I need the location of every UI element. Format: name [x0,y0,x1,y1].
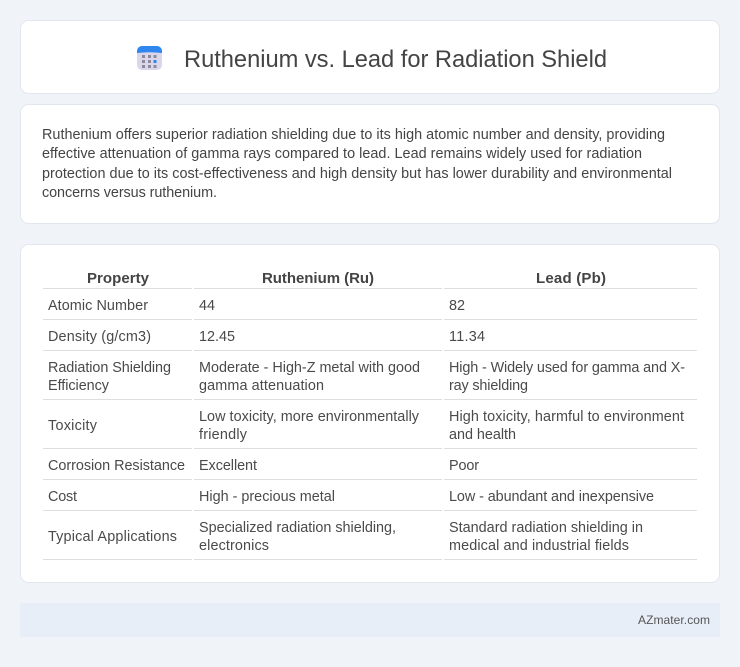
summary text: protection due to its cost-effectiveness and high density but has lower durability and environmental [42,166,672,182]
row: radiation shielding efficiency [48,360,685,394]
panel: comparison table [20,244,720,582]
summary text [42,127,672,201]
row: atomic number: 44 [199,298,215,314]
row: density: 11.34 [449,329,485,345]
row: density: 12.45 [199,329,235,345]
row: radiation shielding efficiency: Efficiency [48,378,110,394]
table header: Ruthenium (Ru) [262,270,374,287]
row: corrosion resistance [48,458,479,474]
row: toxicity: Toxicity [48,418,98,434]
table row lines [43,288,697,560]
row: cost: High - precious metal [199,489,335,505]
summary text: Ruthenium offers superior radiation shielding due to its high atomic number and density, providing [42,127,665,143]
table header: Lead (Pb) [536,270,606,287]
row: typical applications: Standard radiation shielding in [449,520,643,536]
summary text: concerns versus ruthenium. [42,185,217,201]
table header [87,270,606,287]
row: cost [48,489,654,505]
panel: title card [20,20,720,94]
row: toxicity: friendly [199,427,248,443]
row: atomic number: Atomic Number [48,298,148,314]
row: atomic number [48,298,465,314]
row: atomic number: 82 [449,298,465,314]
row: typical applications: Specialized radiation shielding, [199,520,396,536]
icon: calendar abacus [137,46,162,70]
row: toxicity: and health [449,427,516,443]
row: corrosion resistance: Corrosion Resistance [48,458,185,474]
row: typical applications: Typical Applications [48,529,177,545]
row: radiation shielding efficiency: gamma attenuation [199,378,324,394]
table header: Property [87,270,150,287]
row: toxicity: High toxicity, harmful to environment [449,409,684,425]
row: radiation shielding efficiency: ray shielding [449,378,528,394]
footer bar [20,603,720,637]
row: toxicity [48,409,684,443]
row: typical applications: electronics [199,538,269,554]
row: typical applications [48,520,643,554]
row: corrosion resistance: Poor [449,458,479,474]
row: radiation shielding efficiency: Radiation Shielding [48,360,171,376]
summary text: effective attenuation of gamma rays compared to lead. Lead remains widely used for radiation [42,146,642,162]
title: Ruthenium vs. Lead for Radiation Shield [184,47,607,73]
row: cost: Cost [48,489,77,505]
row: corrosion resistance: Excellent [199,458,257,474]
row: typical applications: medical and industrial fields [449,538,629,554]
row: radiation shielding efficiency: High - Widely used for gamma and X- [449,360,685,376]
row: cost: Low - abundant and inexpensive [449,489,654,505]
row: toxicity: Low toxicity, more environmentally [199,409,420,425]
footer credit: AZmater.com [638,613,710,627]
row: radiation shielding efficiency: Moderate - High-Z metal with good [199,360,420,376]
panel: summary [20,104,720,224]
row: density [48,329,485,345]
row: density: Density (g/cm3) [48,329,151,345]
